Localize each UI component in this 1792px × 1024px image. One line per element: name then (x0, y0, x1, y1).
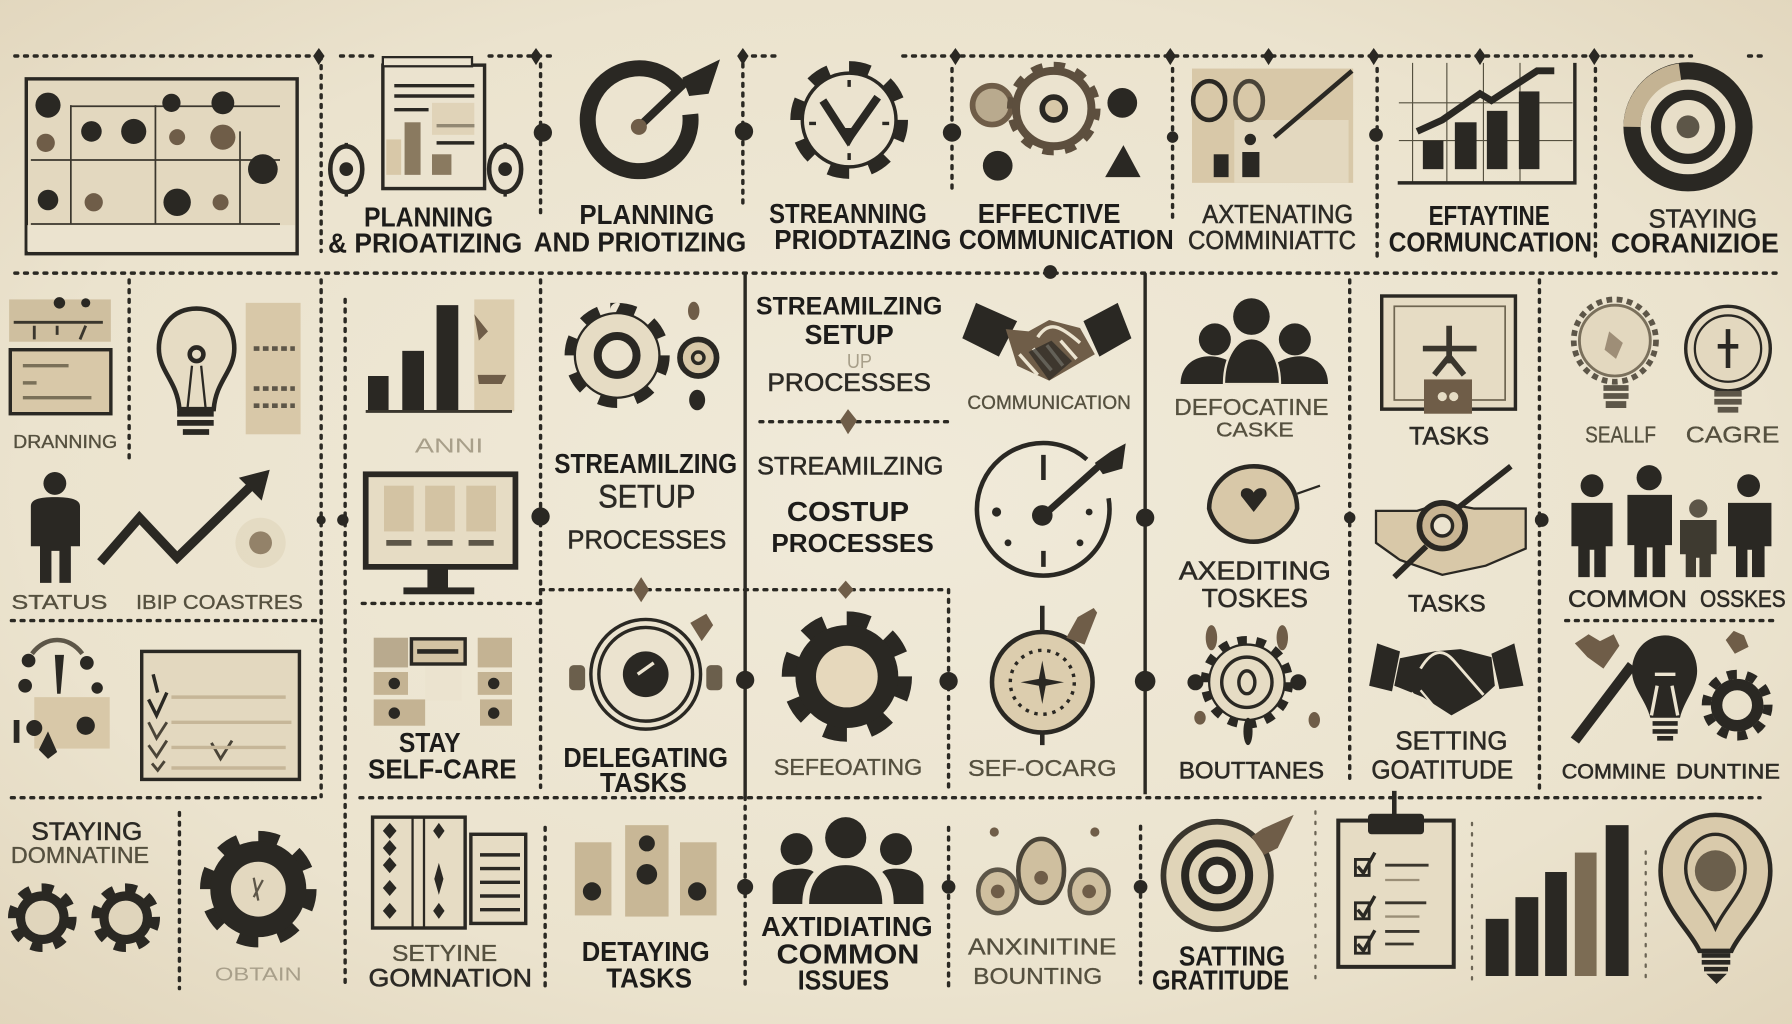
label: GOMNATION (369, 964, 532, 992)
panel: communication handshake (962, 303, 1131, 414)
panel: top-row planning table (26, 79, 297, 254)
panel: tasks document (1382, 296, 1515, 451)
icon: three people (1181, 298, 1328, 384)
icon: three coins (978, 827, 1109, 913)
panel: staying organized target (1611, 71, 1779, 259)
label: CORMUNCATION (1389, 226, 1592, 257)
label (1188, 199, 1356, 255)
panel: checklist with cluster (14, 640, 299, 779)
panel: self-care compass (968, 606, 1117, 781)
icon: clipboard checklist (1338, 814, 1454, 967)
label: ANXINITINE (968, 933, 1117, 959)
label: COMMINIATTC (1188, 225, 1356, 255)
label: AXTIDIATING (761, 911, 933, 942)
panel: planning and prioritizing document (328, 57, 522, 259)
icon: person (31, 472, 80, 583)
label: EFFECTIVE (978, 198, 1121, 229)
label: PROCESSES (567, 525, 726, 555)
icon: gears (973, 66, 1141, 181)
panel: effective communication gears (959, 66, 1174, 255)
icon: hands with magnifier (1376, 466, 1526, 577)
label: DELEGATING (563, 742, 728, 773)
panel: bulb gear pencil (1562, 631, 1780, 783)
chart: rising bars (1486, 825, 1629, 976)
label (1562, 758, 1780, 783)
label (1389, 200, 1592, 257)
label (554, 448, 737, 555)
panel: rising bar chart (1389, 63, 1592, 257)
text block: streamlining setup processes: PROCESSES (767, 369, 931, 397)
label: DETAYING (582, 936, 710, 967)
label: DRANNING (13, 431, 117, 452)
panel: alternating communication beige card (1188, 69, 1356, 255)
icon: solid gear (792, 622, 902, 731)
panel: common issues four people (1568, 465, 1786, 613)
label: SATTING (1179, 941, 1285, 972)
panel: tasks hands and gear (1376, 466, 1526, 617)
panel: streamlining clock (769, 69, 951, 255)
panel: staying dominating gears (11, 818, 155, 947)
panel: axediting tasks heart (1179, 466, 1331, 613)
label: TASKS (606, 962, 692, 993)
text block: streamlining setup processes: UP (847, 350, 872, 373)
panel: bar chart with faint caption (366, 299, 514, 458)
label: DEFOCATINE (1174, 394, 1329, 420)
icon: beige light bulb (1661, 815, 1770, 984)
icon: schedule table and list (373, 817, 526, 928)
icon: three solid people (773, 817, 923, 904)
icon: bullseye (1632, 71, 1744, 183)
text block: streamlining costup processes: STREAMILZING (757, 452, 943, 480)
label: COMMUNICATION (967, 392, 1131, 414)
label (369, 940, 532, 992)
text block: streamlining setup processes (756, 292, 942, 397)
label: TASKS (600, 767, 687, 798)
panel: satting gratitude target (1152, 815, 1294, 996)
panel: solid gear (774, 622, 922, 780)
icon: report document (330, 57, 521, 197)
label: STREANNING (769, 198, 927, 229)
label: SELF-CARE (368, 753, 517, 784)
label: IBIP COASTRES (136, 591, 303, 614)
icon: beige card with check (1192, 69, 1353, 183)
label: ISSUES (798, 965, 889, 996)
label (769, 198, 951, 255)
icon: outlined gears (571, 302, 717, 410)
text block: streamlining setup processes: STREAMILZING (756, 292, 942, 320)
icon: heart badge (1209, 466, 1320, 542)
icon: target with dart (1163, 815, 1294, 929)
label (1371, 726, 1513, 784)
label: CAGRE (1686, 421, 1779, 447)
panel: stay self-care (368, 638, 517, 784)
label (328, 201, 522, 259)
label (1611, 203, 1779, 259)
label: BOUNTING (973, 963, 1102, 989)
icon: computer monitor (366, 474, 515, 594)
icon: clock with arrow (977, 443, 1126, 576)
label: COMMINE (1562, 758, 1666, 783)
icon: clock gear (798, 69, 901, 171)
label (11, 818, 149, 868)
label: COMMON (1568, 586, 1687, 613)
label (761, 911, 933, 996)
label: SEF-OCARG (968, 755, 1117, 781)
text block: streamlining setup processes: SETUP (805, 319, 894, 350)
label: TASKS (1409, 423, 1489, 451)
panel: big gear with faint caption (208, 839, 309, 985)
label: SETYINE (392, 940, 497, 966)
label (368, 727, 517, 784)
panel: delegating tasks people (1174, 298, 1329, 442)
icon: rising arrow (101, 470, 286, 568)
label: COMMON (777, 938, 919, 969)
panel: self-care bulbs (1574, 299, 1779, 447)
label (534, 199, 746, 257)
label: DOMNATINE (11, 842, 149, 868)
label: EFTAYTINE (1429, 200, 1550, 231)
text block: streamlining costup processes: PROCESSES (771, 528, 934, 558)
icon: small gears (13, 888, 155, 947)
label (1585, 421, 1779, 447)
label (582, 936, 710, 993)
icon: dark handshake (1369, 643, 1523, 715)
label: TASKS (1408, 590, 1486, 617)
label: SEFEOATING (774, 754, 922, 780)
label: AXTENATING (1202, 199, 1353, 229)
label (1152, 941, 1289, 996)
label: ANNI (415, 435, 483, 458)
label: PRIODTAZING (774, 224, 951, 255)
label: AXEDITING (1179, 555, 1331, 585)
label: STAY (399, 727, 461, 758)
icon: dark bulb, gear and pencil (1575, 631, 1768, 741)
label: PLANNING (579, 199, 714, 230)
icon: checklist sheet (142, 651, 299, 779)
label (1174, 394, 1329, 442)
panel: target with arrow (534, 59, 746, 257)
label (1568, 586, 1786, 613)
panel: avoiding common issues people (761, 817, 933, 996)
label: GRATITUDE (1152, 965, 1289, 996)
panel: anxiniting bounting coins (968, 827, 1117, 989)
panel: delegating tasks rings (563, 614, 728, 798)
label: PLANNING (364, 201, 493, 232)
label: STREAMILZING (554, 448, 737, 479)
label: STAYING (1649, 203, 1757, 233)
panel: person and growth (11, 470, 303, 614)
label (968, 933, 1117, 989)
label: GOATITUDE (1371, 754, 1513, 784)
chart: three bars (366, 299, 514, 411)
label: STAYING (31, 818, 142, 846)
label: TOSKES (1202, 583, 1308, 613)
label: DUNTINE (1676, 758, 1780, 783)
icon: two round bulbs (1574, 299, 1770, 413)
icon: sun ornament (1187, 625, 1320, 745)
label (11, 591, 303, 614)
label: STATUS (11, 591, 107, 614)
label: CASKE (1216, 419, 1294, 442)
icon: framed task sheet (1382, 296, 1515, 414)
label: SEALLF (1585, 421, 1656, 447)
icon: target arrow (588, 59, 720, 171)
text block: streamlining costup processes: COSTUP (787, 496, 909, 527)
label: BOUTTANES (1179, 757, 1324, 784)
icon: tile collage (374, 638, 512, 726)
icon: three tiles (575, 825, 717, 917)
panel: detaying tasks tiles (575, 825, 717, 993)
panel: setting gratitude handshake (1369, 643, 1523, 784)
panel: boundaries ornament (1179, 625, 1324, 784)
icon: concentric rings (569, 614, 722, 729)
panel: setting domination table (369, 817, 532, 992)
label: AND PRIOTIZING (534, 226, 746, 257)
icon: handshake (962, 303, 1131, 381)
icon: outlined light bulb with note column (159, 303, 301, 434)
label: & PRIOATIZING (328, 228, 522, 259)
icon: chart with trend line (1398, 63, 1575, 183)
icon: four people (1571, 465, 1771, 577)
panel: planning cards (9, 297, 117, 452)
label (1179, 555, 1331, 613)
label: CORANIZIOE (1611, 228, 1779, 259)
panel: streamlining setup processes, gear (554, 302, 737, 555)
label: SETUP (598, 478, 695, 514)
label: OBTAIN (215, 964, 302, 985)
label: SETTING (1395, 726, 1507, 756)
label (563, 742, 728, 798)
icon: clustered marks (14, 640, 110, 759)
icon: solid gear (208, 839, 309, 939)
label: COMMUNICATION (959, 224, 1174, 255)
label (959, 198, 1174, 255)
text block: streamlining costup processes (757, 452, 943, 558)
icon: compass (992, 606, 1097, 745)
icon: beige note cards (9, 297, 111, 414)
